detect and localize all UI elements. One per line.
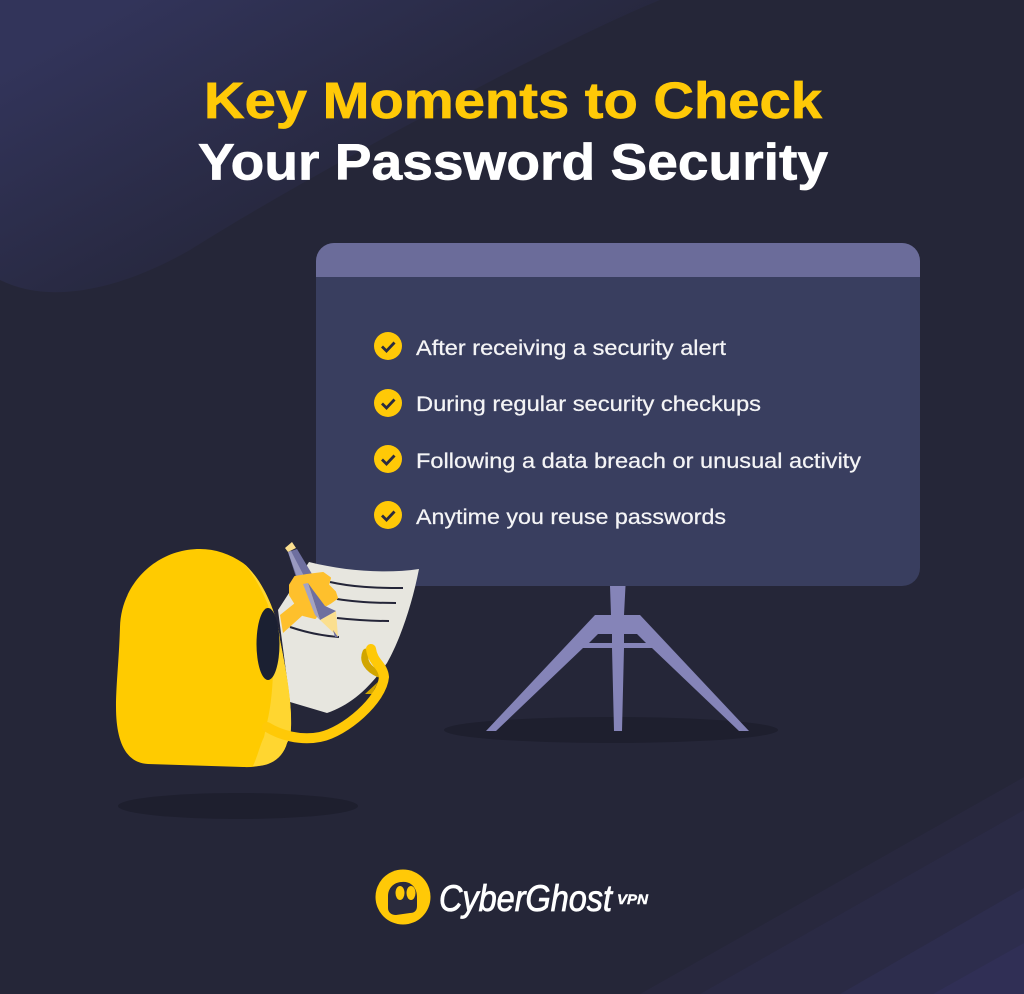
item 4 — [374, 501, 726, 529]
thumb — [365, 652, 379, 674]
item 4: Anytime you reuse passwords — [416, 506, 726, 529]
arm and hand — [280, 542, 338, 637]
eye — [256, 608, 280, 680]
lower arm — [267, 649, 384, 738]
title: Key Moments to Check — [204, 72, 823, 129]
stand shadow — [444, 717, 778, 743]
pencil lower body — [320, 611, 338, 637]
hand — [290, 573, 337, 618]
item 2: During regular security checkups — [416, 393, 761, 416]
forearm — [280, 603, 303, 633]
ghost character with notepad — [116, 542, 419, 767]
board header bar — [316, 243, 920, 277]
panel: board — [316, 243, 920, 586]
ghost shadow — [118, 793, 358, 819]
body highlight — [243, 563, 291, 766]
ghost body — [116, 549, 291, 767]
pencil upper body — [288, 549, 312, 577]
item 3: Following a data breach or unusual activity — [416, 450, 862, 473]
item 2 — [374, 389, 761, 417]
logo — [376, 870, 648, 924]
finger shadow behind paper corner — [365, 682, 378, 694]
title — [198, 72, 829, 190]
presentation board stand — [444, 586, 778, 743]
logo wordmark: CyberGhost — [439, 878, 613, 919]
checklist — [374, 332, 862, 529]
title: Your Password Security — [198, 134, 829, 190]
logo icon — [376, 870, 430, 924]
item 1 — [374, 332, 726, 360]
logo: VPN — [617, 892, 648, 907]
notepad — [278, 562, 419, 713]
item 1: After receiving a security alert — [416, 337, 726, 360]
item 3 — [374, 445, 862, 473]
